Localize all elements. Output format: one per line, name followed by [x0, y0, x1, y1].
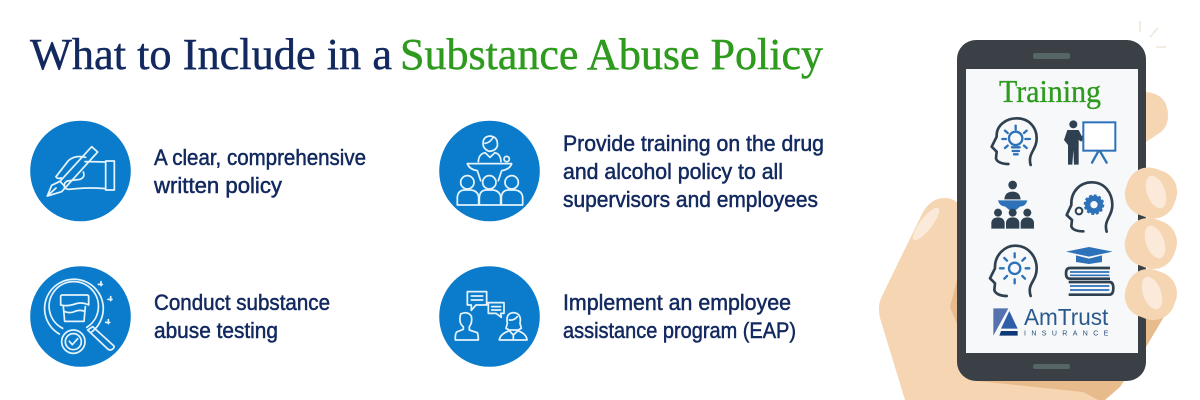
icon: speaker and audience [991, 181, 1034, 229]
title [30, 30, 823, 79]
text: EAP: Implement an employee [563, 290, 791, 315]
fingers [1118, 161, 1183, 326]
text: training: and alcohol policy to all [563, 159, 783, 184]
item: substance testing [30, 266, 330, 367]
hand [879, 92, 1168, 400]
icon: head with sun [990, 246, 1037, 296]
text: written policy [153, 145, 366, 198]
text: training [563, 131, 824, 212]
icon: two people talking [439, 266, 540, 367]
text: substance testing: Conduct substance [154, 290, 330, 315]
phone [957, 40, 1146, 381]
item: EAP [439, 266, 796, 367]
icon: books and graduation cap [1066, 247, 1113, 295]
text: training: supervisors and employees [563, 187, 818, 212]
illustration: hand holding phone [879, 21, 1183, 400]
text: EAP [563, 290, 796, 343]
sparkle lines [1140, 21, 1166, 47]
logo: AmTrust Insurance: INSURANCE [1024, 330, 1109, 337]
icon: speaker at podium with audience [439, 121, 540, 221]
icon: head with gears [1067, 182, 1112, 232]
icon: head with lightbulb [992, 118, 1037, 165]
logo: AmTrust Insurance [993, 304, 1109, 337]
logo: AmTrust Insurance: AmTrust [1024, 304, 1109, 330]
text: EAP: assistance program (EAP) [563, 318, 796, 343]
title: What to Include in a [30, 30, 392, 79]
item: training [439, 121, 824, 221]
icon: hand writing with pen [30, 121, 131, 221]
item: written policy [30, 121, 366, 221]
screen heading: Training [999, 73, 1101, 109]
text: training: Provide training on the drug [563, 131, 824, 156]
text: substance testing [154, 290, 330, 343]
text: written policy: A clear, comprehensive [154, 145, 366, 170]
text: substance testing: abuse testing [154, 318, 278, 343]
icon: presenter at board [1064, 120, 1115, 165]
text: written policy: written policy [153, 173, 282, 198]
icon: magnifier and sample cup [30, 266, 131, 367]
title: Substance Abuse Policy [400, 30, 823, 79]
